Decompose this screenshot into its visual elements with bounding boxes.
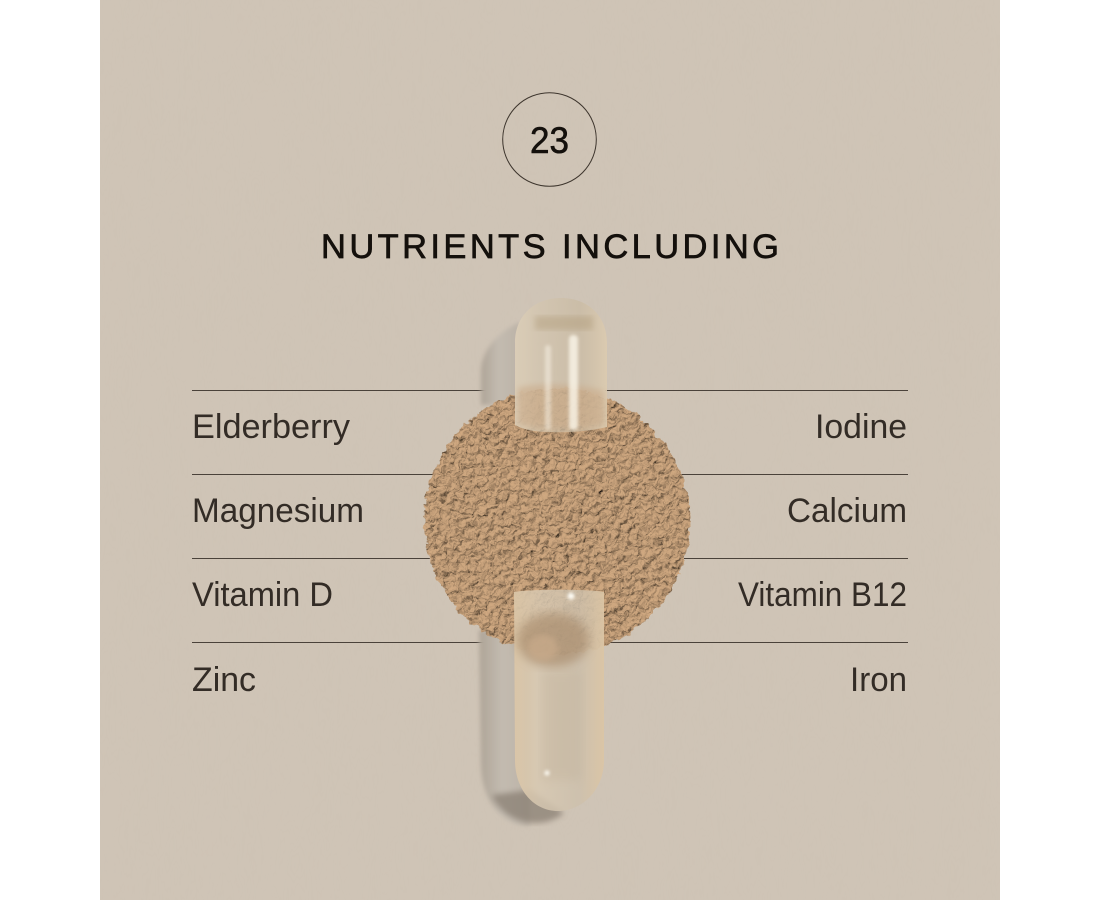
powder visible inside top capsule (518, 385, 604, 428)
right nutrient list: Vitamin B12 (738, 576, 907, 614)
powder visible inside bottom capsule (517, 613, 589, 667)
right divider lines (605, 390, 908, 642)
left nutrient list (192, 408, 364, 699)
highlights on bottom capsule (544, 592, 574, 776)
left nutrient list: Vitamin D (192, 576, 333, 614)
left nutrient list: Elderberry (192, 408, 350, 446)
top capsule half (515, 298, 607, 432)
right nutrient list: Iodine (815, 408, 907, 446)
count badge (503, 93, 596, 186)
right nutrient list: Calcium (787, 492, 907, 530)
right nutrient list: Iron (850, 661, 907, 699)
highlights on top capsule (545, 335, 578, 430)
heading: NUTRIENTS INCLUDING (321, 228, 779, 266)
left nutrient list: Magnesium (192, 492, 364, 530)
capsule shadows (479, 322, 564, 826)
left divider lines (192, 390, 515, 642)
bottom capsule half (514, 590, 604, 811)
right nutrient list (738, 408, 907, 699)
powder pile (424, 388, 690, 654)
count badge: 23 (530, 120, 569, 161)
left nutrient list: Zinc (192, 661, 256, 699)
